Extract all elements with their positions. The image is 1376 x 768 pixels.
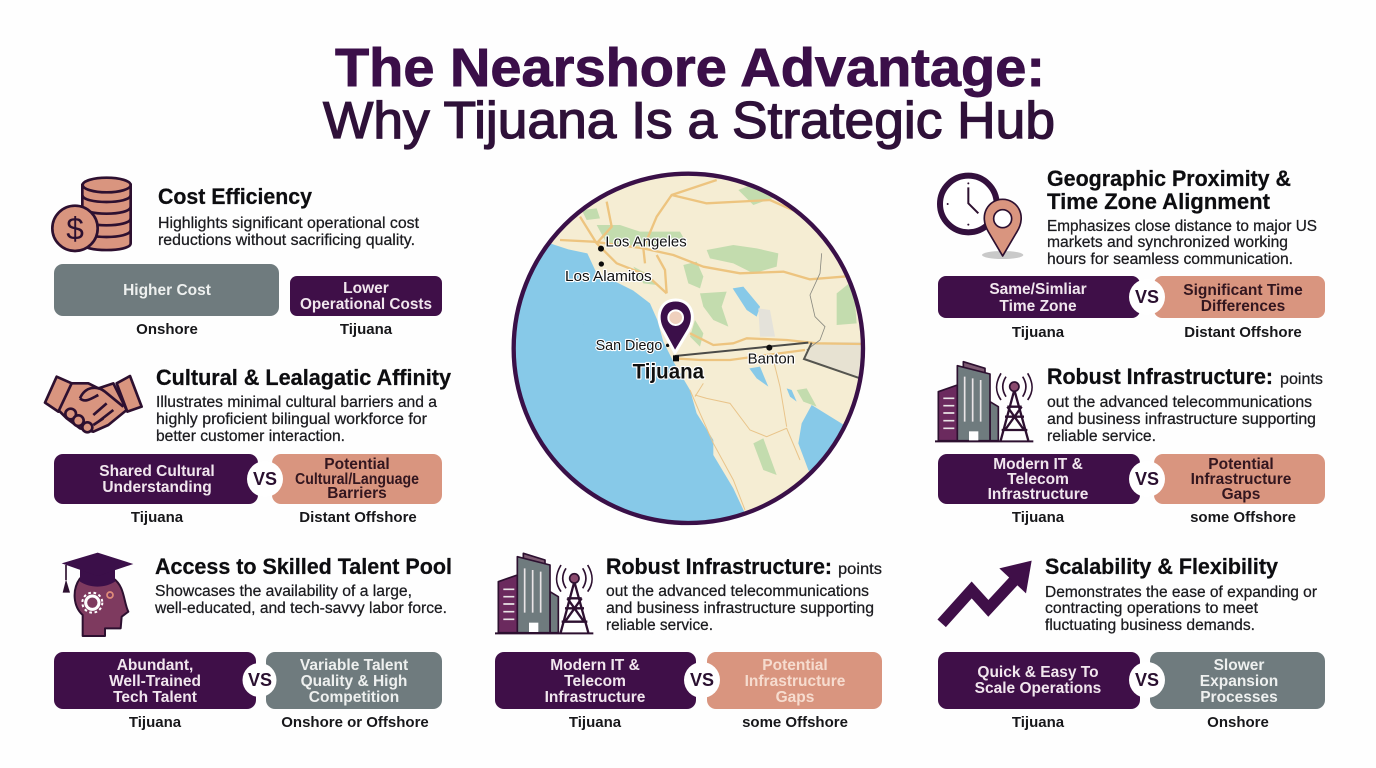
text block: Highlights significant operational cost: [158, 215, 420, 232]
map labels: [565, 235, 795, 383]
map gulf: [798, 405, 843, 472]
map labels: Banton: [748, 352, 795, 368]
comparison: tijuana vs onshore: Onshore: [1207, 714, 1269, 731]
panel: skilled talent: [54, 553, 452, 731]
map green areas: [582, 180, 857, 475]
text block: highly proficient bilingual workforce for: [156, 411, 427, 428]
text block: reductions without sacrificing quality.: [158, 232, 415, 249]
comparison: tijuana vs onshore or offshore: [54, 652, 442, 731]
icon: clock and pin: [940, 176, 1023, 259]
comparison: onshore vs tijuana: Lower: [343, 280, 389, 297]
comparison: tijuana vs some offshore: some Offshore: [742, 714, 848, 731]
map ocean: [516, 244, 744, 521]
comparison: tijuana vs onshore or offshore: VS: [248, 670, 272, 690]
comparison: tijuana vs onshore or offshore: Well-Trained: [109, 673, 201, 690]
comparison: tijuana vs distant offshore: [938, 276, 1325, 341]
panel: robust infrastructure right: [935, 362, 1325, 526]
heading: Time Zone Alignment: [1047, 189, 1271, 214]
text block: [156, 394, 437, 445]
comparison: tijuana vs some offshore: Infrastructure: [745, 673, 846, 690]
comparison: tijuana vs distant offshore: Same/Simliar: [989, 281, 1087, 298]
heading: Robust Infrastructure:: [1047, 364, 1273, 389]
comparison: tijuana vs onshore or offshore: Abundant,: [117, 657, 193, 674]
comparison: tijuana vs distant offshore: Potential: [324, 456, 390, 473]
text block: [158, 215, 420, 249]
comparison: tijuana vs some offshore: Potential: [762, 657, 828, 674]
text block: better customer interaction.: [156, 428, 345, 445]
comparison: tijuana vs onshore: Processes: [1200, 689, 1278, 706]
comparison: tijuana vs distant offshore: Significant Time: [1183, 282, 1303, 299]
panel: robust infrastructure centre: [495, 553, 882, 731]
comparison: tijuana vs distant offshore: VS: [1135, 287, 1159, 307]
heading: Robust Infrastructure:: [606, 554, 832, 579]
comparison: tijuana vs onshore: Quick & Easy To: [977, 664, 1099, 681]
text block: hours for seamless communication.: [1047, 251, 1293, 268]
map borders: [675, 253, 860, 378]
comparison: tijuana vs some offshore: Infrastructure: [988, 486, 1089, 503]
text block: [1047, 394, 1316, 445]
title: [323, 38, 1055, 150]
comparison: tijuana vs onshore: Scale Operations: [975, 680, 1101, 697]
heading: Scalability & Flexibility: [1045, 554, 1279, 579]
map: Southern California and Baja with Tijuana pin: [500, 173, 867, 537]
comparison: tijuana vs some offshore: Tijuana: [1012, 509, 1065, 526]
text block: and business infrastructure supporting: [1047, 411, 1316, 428]
text block: and business infrastructure supporting: [606, 600, 874, 617]
comparison: onshore vs tijuana: [54, 264, 442, 338]
icon: handshake: [45, 376, 142, 432]
map labels: Los Alamitos: [565, 269, 652, 285]
comparison: tijuana vs onshore or offshore: Competition: [309, 689, 399, 706]
comparison: tijuana vs some offshore: [495, 652, 882, 731]
icon: coins: [52, 178, 131, 251]
comparison: tijuana vs onshore: VS: [1135, 670, 1159, 690]
comparison: tijuana vs some offshore: [938, 454, 1325, 526]
comparison: tijuana vs distant offshore: Understanding: [102, 479, 212, 496]
map gray region: [806, 342, 861, 376]
comparison: tijuana vs onshore: Tijuana: [1012, 714, 1065, 731]
heading: Cultural & Lealagatic Affinity: [156, 365, 452, 390]
comparison: onshore vs tijuana: Higher Cost: [123, 282, 211, 299]
comparison: tijuana vs distant offshore: Distant Offshore: [299, 509, 417, 526]
comparison: tijuana vs some offshore: Gaps: [1222, 486, 1260, 503]
panel: geographic proximity: [938, 166, 1325, 341]
text block: Showcases the availability of a large,: [155, 583, 412, 600]
comparison: tijuana vs some offshore: Tijuana: [569, 714, 622, 731]
comparison: tijuana vs some offshore: VS: [690, 670, 714, 690]
map dots: [598, 246, 772, 361]
text block: [606, 583, 874, 634]
icon: graduate head with gear: [62, 553, 133, 636]
comparison: tijuana vs onshore or offshore: Tech Talent: [113, 689, 197, 706]
text block: Emphasizes close distance to major US: [1047, 218, 1317, 235]
text block: fluctuating business demands.: [1045, 617, 1255, 634]
heading: Cost Efficiency: [158, 184, 313, 209]
title: Why Tijuana Is a Strategic Hub: [323, 92, 1055, 150]
comparison: tijuana vs onshore or offshore: Variable Talent: [300, 657, 408, 674]
text block: [1047, 218, 1317, 268]
text block: out the advanced telecommunications: [606, 583, 869, 600]
text block: [1045, 584, 1317, 634]
text block: Demonstrates the ease of expanding or: [1045, 584, 1317, 601]
comparison: tijuana vs distant offshore: Tijuana: [1012, 324, 1065, 341]
comparison: onshore vs tijuana: Operational Costs: [300, 296, 432, 313]
panel: scalability: [938, 554, 1325, 731]
comparison: tijuana vs onshore or offshore: Tijuana: [129, 714, 182, 731]
comparison: tijuana vs some offshore: Potential: [1208, 456, 1274, 473]
icon: rising arrow: [942, 561, 1032, 623]
comparison: tijuana vs distant offshore: [54, 454, 442, 526]
text block: out the advanced telecommunications: [1047, 394, 1312, 411]
comparison: tijuana vs some offshore: Gaps: [776, 689, 814, 706]
comparison: tijuana vs distant offshore: Cultural/Language: [295, 471, 419, 488]
icon: building and telecom tower: [495, 553, 593, 633]
comparison: onshore vs tijuana: Onshore: [136, 321, 198, 338]
comparison: tijuana vs distant offshore: Barriers: [327, 485, 387, 502]
text block: reliable service.: [1047, 428, 1156, 445]
heading: Access to Skilled Talent Pool: [155, 554, 452, 579]
text block: markets and synchronized working: [1047, 234, 1288, 251]
map roads: [560, 180, 863, 360]
comparison: tijuana vs distant offshore: Time Zone: [999, 298, 1077, 315]
comparison: tijuana vs some offshore: Infrastructure: [1191, 471, 1292, 488]
comparison: tijuana vs distant offshore: Distant Offshore: [1184, 324, 1302, 341]
panel: cultural affinity: [45, 365, 452, 526]
text block: reliable service.: [606, 617, 713, 634]
comparison: tijuana vs some offshore: Modern IT &: [993, 456, 1083, 473]
comparison: tijuana vs some offshore: VS: [1135, 469, 1159, 489]
heading: Geographic Proximity &: [1047, 166, 1291, 191]
comparison: tijuana vs some offshore: some Offshore: [1190, 509, 1296, 526]
comparison: tijuana vs distant offshore: Differences: [1201, 298, 1285, 315]
map labels: Los Angeles: [605, 235, 687, 251]
heading: points: [1280, 371, 1323, 388]
icon: coins: $: [66, 210, 84, 246]
comparison: tijuana vs some offshore: Modern IT &: [550, 657, 640, 674]
comparison: tijuana vs onshore: Slower: [1214, 657, 1264, 674]
panel: cost efficiency: [52, 178, 442, 338]
comparison: tijuana vs distant offshore: Shared Cultural: [99, 463, 215, 480]
map desert patch: [758, 308, 775, 337]
title: The Nearshore Advantage:: [335, 38, 1045, 98]
map labels: Tijuana: [633, 359, 704, 383]
heading: [1047, 166, 1291, 214]
comparison: onshore vs tijuana: Tijuana: [340, 321, 393, 338]
map labels: San Diego: [596, 338, 662, 354]
comparison: tijuana vs onshore: Expansion: [1200, 673, 1278, 690]
comparison: tijuana vs distant offshore: Tijuana: [131, 509, 184, 526]
comparison: tijuana vs onshore: [938, 652, 1325, 731]
text block: Illustrates minimal cultural barriers and a: [156, 394, 437, 411]
comparison: tijuana vs distant offshore: VS: [253, 469, 277, 489]
icon: building and telecom tower: [935, 362, 1033, 441]
heading: points: [838, 561, 882, 578]
comparison: tijuana vs some offshore: Telecom: [1007, 471, 1069, 488]
map pin: [659, 300, 692, 353]
text block: well-educated, and tech-savvy labor force.: [154, 600, 447, 617]
text block: contracting operations to meet: [1045, 600, 1259, 617]
comparison: tijuana vs some offshore: Infrastructure: [545, 689, 646, 706]
text block: [154, 583, 447, 617]
map lakes: [732, 286, 796, 402]
comparison: tijuana vs onshore or offshore: Onshore or Offshore: [281, 714, 429, 731]
comparison: tijuana vs onshore or offshore: Quality & High: [301, 673, 407, 690]
comparison: tijuana vs some offshore: Telecom: [564, 673, 626, 690]
